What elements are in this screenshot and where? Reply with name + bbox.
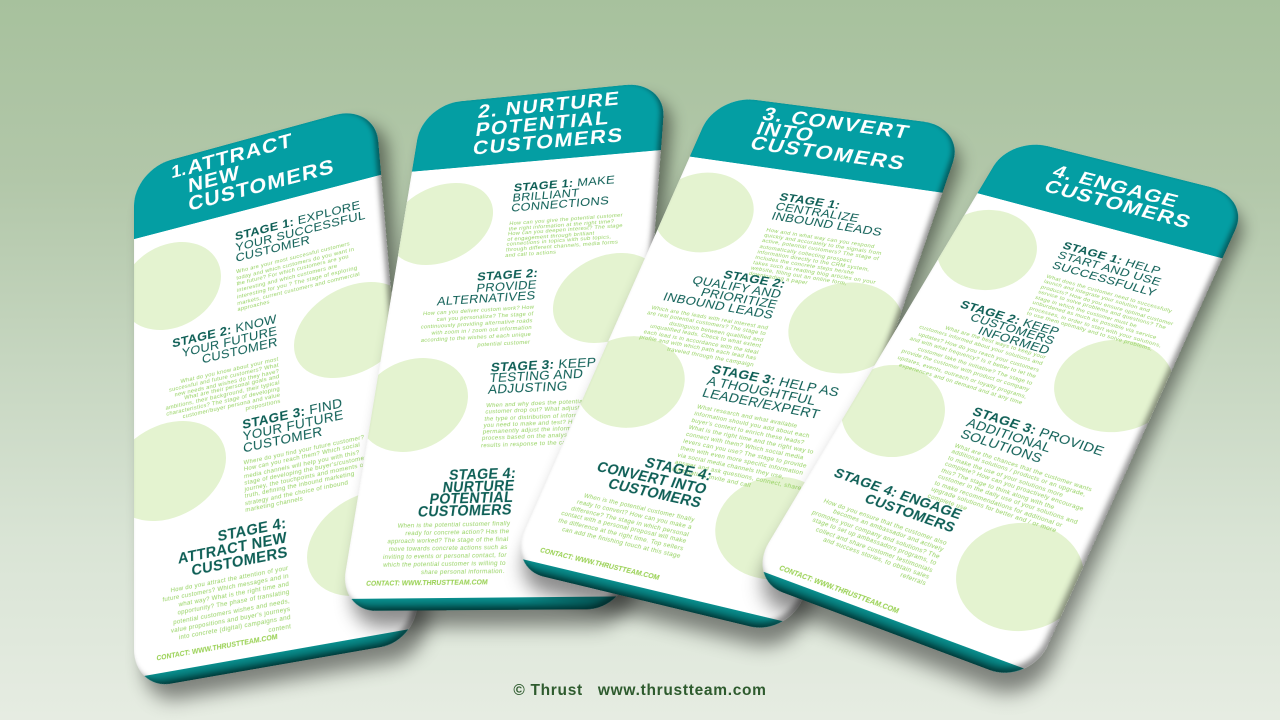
- card 2 stage 3: you need to make and test? How can you: [483, 417, 607, 429]
- card 3 stage 2: PRIORITIZE: [699, 286, 780, 312]
- card 4 stage 3: [926, 404, 1107, 535]
- card 4 contact line: CONTACT: WWW.THRUSTTEAM.COM: [777, 563, 901, 615]
- card 2 stage 4: move towards concrete actions such as: [388, 544, 508, 553]
- card 1 stage 4: content: [268, 623, 291, 634]
- card 2 title: POTENTIAL: [474, 106, 611, 140]
- card 2 stage 1: connections in topics with sub topics,: [506, 235, 612, 248]
- card 4 stage 2: customer take the initiative? The stage to: [917, 346, 1034, 386]
- card 4 stage 4: STAGE 4: ENGAGE: [831, 465, 965, 523]
- card 2 stage 2: PROVIDE: [476, 277, 538, 295]
- card 4 stage 2: updates? How do you reach your customers: [917, 331, 1041, 373]
- card 3 stage 1: active, potential customers? The stage of: [761, 238, 880, 262]
- card 2 stage 1: through different channels, media forms: [506, 239, 618, 253]
- card 2 stage 1: of engagement through brilliant: [507, 230, 595, 242]
- card 1 stage 4: STAGE 4:: [217, 515, 287, 545]
- card 4 stage 3: SOLUTIONS: [958, 426, 1045, 466]
- card 2 stage 2: STAGE 2:: [476, 266, 539, 284]
- card 4 stage 2: and with what frequency? Is it better to let the: [908, 336, 1037, 380]
- card 1 content: [134, 114, 416, 684]
- card 4 stage 1: to use them optimally and to solve problems.: [1025, 311, 1153, 353]
- card 3 stage 4: CUSTOMERS: [605, 476, 704, 512]
- card 2 content: share personal information.: [420, 568, 505, 577]
- card 1 title: [171, 128, 335, 216]
- card 3 stage 3: [671, 362, 842, 492]
- card 4 stage 4: collect and share customer testimonials: [814, 526, 934, 574]
- card 3 title: INTO: [753, 117, 819, 146]
- card 4 stage 2: INFORMED: [976, 324, 1053, 357]
- card 4 stage 1: unburdened as much as possible via service: [1031, 300, 1157, 341]
- card 3 title: [747, 103, 914, 174]
- card 1 stage 1: today and which customers do you want in: [236, 246, 354, 281]
- card 3 stage 2: INBOUND LEADS: [661, 290, 776, 323]
- card 3 stage 4: the difference at the right time. Top sellers: [557, 518, 684, 553]
- card 2 stage 3: STAGE 3: KEEP: [490, 354, 597, 375]
- card 2 bevel shading: [339, 81, 666, 611]
- card 4 stage 3: ADDITIONAL: [964, 415, 1054, 456]
- card 2 stage 1: How can you deepen interest? The stage: [508, 223, 623, 237]
- card 2 stage 1: How can you give the potential customer: [509, 213, 623, 227]
- card 1 stage 2: new needs and wishes do they have?: [175, 368, 279, 398]
- card 3 stage 2: STAGE 2:: [721, 268, 788, 291]
- card 3 stage 4: ready to convert? How can you make a: [576, 499, 693, 531]
- card 3 stage 2: [638, 268, 788, 368]
- card 2 stage 3: ADJUSTING: [487, 378, 569, 397]
- card 4 stage 3: STAGE 3: PROVIDE: [970, 404, 1107, 459]
- card 2 stage 4: approach worked? The stage of the final: [387, 536, 509, 546]
- card 2 contact line: CONTACT: WWW.THRUSTTEAM.COM: [366, 577, 488, 588]
- card 2 stage 4: which the potential customer is willing to: [383, 560, 506, 569]
- card 1 sheet with header and footer bands: [134, 104, 421, 690]
- card 4 stage 1: SUCCESSFULLY: [1050, 259, 1159, 299]
- card 2 stage 4: [382, 466, 517, 577]
- card 1 stage 4: ATTRACT NEW: [178, 530, 287, 568]
- card 2 stage 2: with zoom in / zoom out information: [431, 325, 532, 337]
- card 3 stage 2: each lead is in accordance with the ideal: [643, 329, 760, 356]
- card 3 contact line: CONTACT: WWW.THRUSTTEAM.COM: [539, 546, 661, 582]
- card 3 stage 4: difference? The stage in which personal: [570, 505, 690, 538]
- card 3 stage 1: CENTRALIZE: [773, 200, 861, 225]
- card 3 header band: [690, 95, 965, 193]
- card 4 stage 3: to make the use of your solutions more: [947, 455, 1064, 499]
- card 4 bevel shading: [747, 137, 1250, 685]
- card 3 stage 2: traveled through the campaign: [666, 346, 755, 368]
- card 3 stage 4: contact with a personal proposal will make: [560, 511, 687, 545]
- card 2 stage 3: process based on the analysis of the: [482, 432, 592, 442]
- card 1 stage 1: CUSTOMER: [236, 233, 311, 265]
- card 3 stage 3: them with even more specific information: [679, 445, 804, 477]
- card 3 stage 3: levers can you use? The stage to provide: [682, 438, 808, 470]
- card 2 stage 4: NURTURE: [442, 478, 516, 496]
- card 2 stage 3: TESTING AND: [489, 366, 584, 386]
- card 4 stage 2: [896, 298, 1062, 406]
- card 1 stage 3: truth, defining the inbound marketing: [245, 471, 355, 500]
- card 3 stage 1: STAGE 1:: [777, 191, 842, 212]
- card 1 stage 1: the future? For which customers are you: [237, 254, 349, 288]
- card 2 stage 2: can you personalize? The stage of: [436, 311, 534, 323]
- card 1 header band: [134, 104, 381, 239]
- card 1 stage 1: STAGE 1: EXPLORE: [235, 198, 361, 244]
- card 3 stage 3: answer and ask questions, connect, share: [673, 459, 802, 492]
- card 3 title: 3. CONVERT: [759, 103, 914, 143]
- card 2 stage 1: [505, 173, 623, 258]
- card 3 footer band: [508, 557, 794, 636]
- card 3 circles: [580, 172, 902, 579]
- card 3 stage 4: CONVERT INTO: [594, 459, 709, 498]
- card 1 stage 2: What are their personal goals and: [184, 374, 280, 402]
- card 1 stage 2: customer/buyer persona and value: [183, 392, 280, 420]
- card 3 content: information, invite and call: [671, 467, 752, 490]
- card 1 stage 2: propositions: [246, 398, 281, 412]
- card 1 stage 3: stage of developing the buyer's/customer: [244, 454, 367, 487]
- card 4 stage 2: STAGE 2: KEEP: [958, 298, 1062, 339]
- card 3 stage 3: buyer's context to enrich these leads?: [690, 417, 805, 446]
- card 1 stage 1: [235, 198, 366, 313]
- card 1 stage 4: How do you attract the attention of your: [171, 564, 289, 594]
- card 2 title: 2. NURTURE: [477, 86, 621, 122]
- card 2 stage 3: the type or distribution of information do: [484, 411, 604, 422]
- card 2 stage 2: How can you deliver custom work? How: [423, 304, 535, 317]
- card 1 contact line: CONTACT: WWW.THRUSTTEAM.COM: [157, 632, 278, 663]
- card 1 stage 1: approaches: [237, 299, 270, 313]
- card 3 content: [520, 100, 955, 628]
- card 1 stage 4: potential customers wishes and needs,: [173, 597, 290, 626]
- card 1 stage 2: CUSTOMER: [202, 335, 278, 367]
- card 2 stage 1: and call to actions: [505, 249, 556, 258]
- card 1 stage 2: STAGE 2: KNOW: [172, 312, 277, 351]
- card 3 stage 1: INBOUND LEADS: [769, 210, 884, 239]
- card 3 stage 2: unqualified leads. Check to what extent: [649, 324, 762, 350]
- card 1 title: NEW: [188, 161, 240, 197]
- card 2 stage 3: [481, 354, 607, 449]
- card 2 stage 4: CUSTOMERS: [417, 501, 513, 520]
- card 2 stage 3: results in response to the campaign: [481, 439, 588, 449]
- card 3 stage 4: When is the potential customer finally: [583, 492, 696, 523]
- card 4 sheet with header and footer bands: [747, 137, 1250, 685]
- card 3 stage 1: automatically collecting prospect: [759, 244, 853, 264]
- card 1 stage 3: CUSTOMER: [243, 424, 323, 456]
- card 2: nurture potential customers: [340, 84, 681, 640]
- card 2 stage 4: inviting to events or personal contact, for: [382, 552, 507, 561]
- card 3 stage 2: profile and with which path each lead has: [638, 335, 757, 362]
- card 2 stage 4: ready for concrete action? Has the: [405, 529, 510, 538]
- card 4 stage 2: updates, events, outreach or loyalty programs,: [896, 355, 1028, 400]
- card 4 title: CUSTOMERS: [1041, 176, 1195, 233]
- card 3 stage 1: How and in what way can you respond: [765, 228, 875, 250]
- card 1: attract new customers: [132, 113, 439, 712]
- card 4 header band: [977, 137, 1250, 258]
- card 2 stage 1: STAGE 1: MAKE: [513, 173, 616, 195]
- card 2 stage 4: STAGE 4:: [448, 466, 517, 484]
- card 4 stage 3: additional solutions / products or an upgrade,: [950, 449, 1087, 499]
- card 1 stage 3: strategy and the choice of inbound: [245, 479, 348, 507]
- card 1 stage 1: interesting and which customers are: [237, 263, 337, 294]
- card 4 stage 1: [1025, 239, 1174, 353]
- card 4 stage 1: What does the customer need to successfully: [1045, 274, 1173, 314]
- card 1 stage 4: [162, 515, 292, 642]
- card 3 title: CUSTOMERS: [747, 132, 909, 174]
- card 4 stage 3: What are the chances that the customer wants: [953, 443, 1093, 493]
- card 2 title: CUSTOMERS: [472, 123, 625, 159]
- card 4 stage 3: to make recommendations for additional or: [933, 480, 1064, 529]
- card 3 stage 3: What is the right time and the right way to: [688, 424, 815, 456]
- card 1 title: ATTRACT: [188, 128, 293, 179]
- card 2 circles: [368, 183, 645, 452]
- card 3 stage 3: LEADER/EXPERT: [700, 385, 822, 422]
- card 4 title: 4. ENGAGE: [1049, 161, 1183, 212]
- card 4 stage 3: this? The stage to think along with the: [940, 467, 1056, 511]
- card 4 stage 1: START AND USE: [1055, 249, 1164, 289]
- card 4 stage 1: STAGE 1: HELP: [1060, 239, 1163, 277]
- card 3 stage 1: website, filling out an online form,: [750, 265, 848, 287]
- card 4 stage 4: CUSTOMERS: [862, 491, 958, 536]
- card 3 stage 1: takes such as reading blog articles on your: [752, 260, 877, 285]
- card 4 content: [762, 146, 1238, 673]
- card 4 stage 4: How do you ensure that the customer also: [822, 498, 948, 547]
- card 1 content: 1.: [171, 159, 187, 182]
- card 4 stage 2: experiences and on demand and at any time: [898, 362, 1024, 406]
- card 1 footer band: [134, 627, 421, 690]
- card 3 stage 2: distinguish between qualified and: [668, 321, 764, 343]
- card 4 stage 4: promotes your company and solutions? The: [811, 509, 941, 560]
- card 3 stage 3: connect with them? Which social media: [685, 431, 805, 461]
- card 4 stage 4: stage to set up ambassadors programs, to: [811, 517, 938, 567]
- card 1 stage 3: STAGE 3: FIND: [242, 395, 343, 433]
- card 1 stage 3: Where do you find your future customer?: [244, 434, 365, 466]
- card 3 stage 4: can add the finishing touch at this stage: [561, 527, 682, 560]
- card 4 stage 4: referrals: [899, 572, 927, 588]
- card 1 circles: [134, 242, 392, 596]
- card 4 stage 4: [811, 465, 965, 588]
- card 4 stage 4: becomes an ambassador and actively: [831, 509, 945, 554]
- card 4 stage 1: processes, in order to start with your solutions,: [1028, 306, 1162, 349]
- card 4 stage 4: and success stories, to obtain sales: [822, 537, 931, 581]
- card 3 bevel shading: [508, 95, 965, 636]
- card 3 stage 1: includes the concrete steps he/she: [754, 255, 855, 276]
- card 3 stage 3: STAGE 3: HELP AS: [709, 362, 842, 400]
- card 2 sheet with header and footer bands: [339, 81, 666, 611]
- card 1 stage 2: characteristics? The stage of developing: [166, 386, 280, 418]
- card 4 stage 3: upgrade solutions for better and / or more: [930, 486, 1057, 535]
- card 3 stage 3: What research and what available: [696, 404, 798, 429]
- card 3 stage 3: A THOUGHTFUL: [705, 374, 818, 409]
- card 1 stage 2: YOUR FUTURE: [182, 323, 278, 360]
- card 1 bevel shading: [134, 104, 421, 690]
- card 4 stage 3: customer in the daily use of your solutions and: [937, 474, 1079, 526]
- card 3 stage 2: Which are the leads with real interest and: [650, 305, 769, 331]
- card 1 stage 4: what way? What is the right time and: [179, 581, 289, 609]
- card 1 stage 3: media channels will help you with this?: [244, 449, 360, 480]
- card 2 stage 3: customer drop out? What adjustments to: [485, 404, 606, 416]
- card 3 stage 1: information directly to the CRM system,: [757, 249, 871, 273]
- card 2 stage 3: When and why does the potential: [486, 398, 585, 409]
- card 4 stage 1: service to solve problems and questions? The: [1037, 290, 1167, 331]
- card 2 header band: [412, 81, 666, 172]
- card 4 stage 1: launch and integrate your solution and: [1042, 279, 1151, 314]
- card 1 stage 3: journey, the touchpoints and moments of: [244, 462, 366, 493]
- card 1 title: CUSTOMERS: [188, 154, 335, 216]
- card 2 stage 1: BRILLIANT: [512, 186, 580, 205]
- card 2 stage 2: [420, 266, 539, 348]
- card 2 title: [472, 86, 625, 159]
- card 4 circles: [842, 210, 1172, 632]
- card 3 stage 2: QUALIFY AND: [690, 274, 784, 302]
- card 3 stage 4: STAGE 4:: [642, 455, 714, 484]
- card 1 stage 1: YOUR SUCCESSFUL: [235, 208, 366, 254]
- copyright credit: © Thrust www.thrustteam.com: [513, 682, 767, 699]
- card 2 stage 4: POTENTIAL: [428, 490, 514, 508]
- card 1 stage 1: interesting for you ? The stage of exploring: [237, 265, 358, 300]
- card 1 stage 2: What do you know about your most: [180, 356, 279, 385]
- card 3 stage 2: are real potential customers? The stage to: [646, 311, 767, 337]
- card 1 stage 1: markets, current customers and commercial: [237, 271, 360, 307]
- card 2 stage 2: potential customer: [477, 339, 531, 348]
- card 3 stage 3: information should you add about each: [693, 410, 811, 439]
- card 1 stage 3: YOUR FUTURE: [242, 407, 344, 444]
- card 1 stage 4: value propositions and buyer's journeys: [171, 606, 291, 635]
- card 3 stage 3: via social media channels they use,: [676, 452, 785, 481]
- card 1 stage 3: How can you reach them? Which social: [244, 442, 360, 473]
- card 3 sheet with header and footer bands: [508, 95, 965, 636]
- card 1 stage 2: [166, 312, 281, 420]
- card 1 stage 4: into concrete (digital) campaigns and: [179, 614, 291, 642]
- card 4 stage 3: complete use: [926, 493, 969, 512]
- card 4 footer band: [747, 568, 1036, 685]
- card 4 stage 2: provide the customer with product or company: [900, 348, 1031, 393]
- card 2 stage 1: CONNECTIONS: [510, 194, 610, 215]
- card 2 stage 3: permanently adjust the information: [482, 425, 587, 436]
- card 2 stage 2: according to the wishes of each unique: [420, 332, 531, 344]
- card 2 content: [345, 84, 664, 611]
- card 1 stage 4: opportunity? The phase of translating: [178, 589, 290, 617]
- card 3 stage 1: downloading a paper: [748, 271, 809, 286]
- card 2 stage 2: ALTERNATIVES: [436, 288, 536, 309]
- card 3 stage 4: [557, 455, 714, 560]
- card 4 stage 2: customers informed about your solutions and: [918, 324, 1044, 367]
- card 2 stage 4: When is the potential customer finally: [397, 521, 511, 530]
- card 1 stage 4: CUSTOMERS: [191, 544, 288, 579]
- card 3 stage 1: quickly and accurately to the signals from: [763, 233, 882, 257]
- card 4 stage 3: complete? How can you proactively encourage: [943, 461, 1085, 513]
- card 2 stage 2: continuously providing alternative roads: [420, 318, 533, 330]
- card 4 stage 2: CUSTOMERS: [967, 311, 1057, 348]
- card 1 stage 3: marketing channels: [245, 496, 303, 514]
- card 4 stage 1: stage in which the customer must be: [1034, 295, 1138, 329]
- card 2 footer band: [339, 596, 628, 611]
- card 2 stage 1: the right information at the right time?: [508, 218, 614, 232]
- card 3 stage 1: [748, 191, 884, 287]
- card 1 stage 2: successful and future customers? What: [169, 362, 279, 393]
- card 4 stage 2: What are the best ways to keep your: [944, 325, 1047, 360]
- card 4: engage customers: [750, 144, 1252, 706]
- card 1 stage 2: ambitions, their background, their typical: [166, 380, 280, 412]
- card 1 stage 4: future customers? Which messages and in: [163, 573, 289, 603]
- card 4 stage 1: products? How do you ensure optimal customer: [1040, 284, 1174, 327]
- card 3: convert into customers: [512, 99, 970, 658]
- card 1 stage 3: [242, 395, 367, 514]
- card 1 stage 1: Who are your most successful customers: [236, 241, 350, 275]
